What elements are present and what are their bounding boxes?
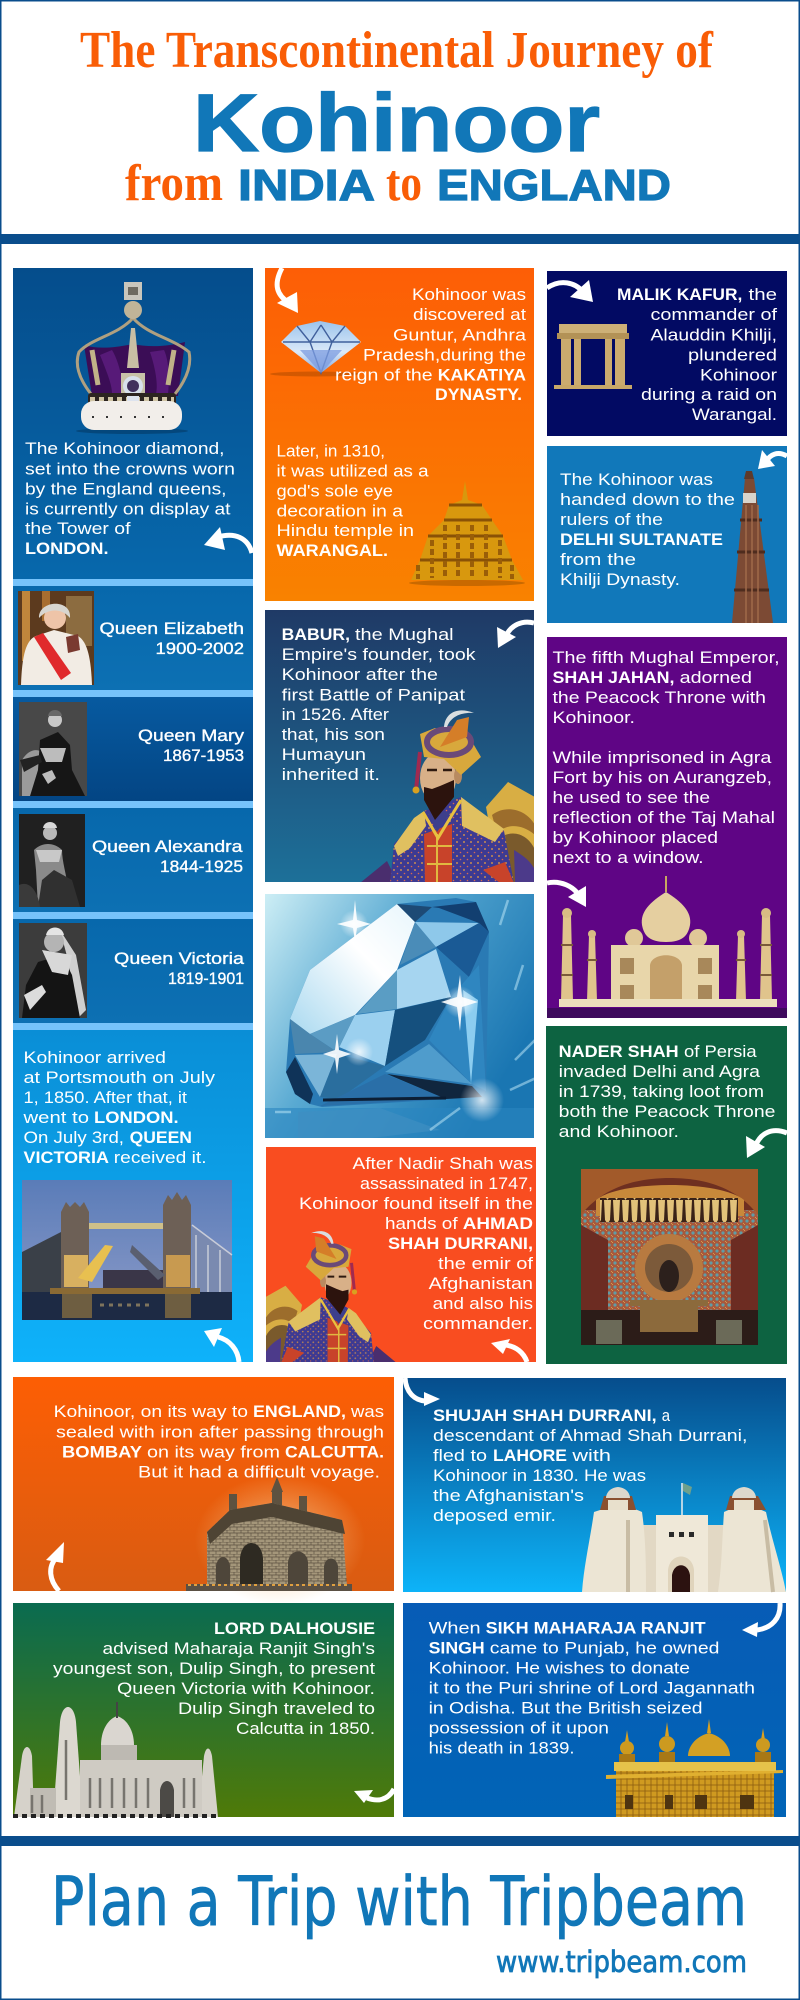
figure: Ahmad Shah Durrani <box>265 1231 396 1363</box>
website url: www.tripbeam.com <box>496 1945 747 1979</box>
panel: Sikh Maharaja Ranjit Singh <box>403 1603 786 1817</box>
photo: Tower Bridge <box>22 1180 232 1320</box>
text block: handed down to the <box>560 491 735 509</box>
arrow <box>547 882 586 907</box>
text block: the Tower of <box>25 520 131 538</box>
icon: diamond <box>270 321 361 376</box>
text block <box>22 1049 216 1167</box>
text block: AHMAD <box>463 1215 533 1233</box>
text block: DELHI SULTANATE <box>560 531 723 549</box>
text block: by Kohinoor placed <box>552 829 718 847</box>
text block: in 1526. After <box>282 706 390 724</box>
arrow <box>547 280 593 302</box>
text block: CALCUTTA. <box>285 1444 384 1462</box>
text block: is currently on display at <box>25 500 231 518</box>
text block: discovery: Pradesh,during the <box>363 346 526 364</box>
panel: discovery at Guntur and Warangal temple <box>265 268 534 601</box>
text block: youngest son, Dulip Singh, to present <box>53 1660 375 1678</box>
icon: large diamond <box>275 898 537 1138</box>
text block: was <box>350 1403 384 1421</box>
panel: Queen Alexandra <box>13 801 253 912</box>
text block: received it. <box>114 1149 207 1167</box>
text block: discovery: Kohinoor was <box>412 286 526 304</box>
text block: rulers of the <box>560 511 663 529</box>
text block: discovery: KAKATIYA <box>438 366 526 384</box>
text block: discovery <box>335 286 527 404</box>
label: Queen Alexandra: Queen Alexandra <box>92 837 243 856</box>
text block: Kohinoor <box>700 366 778 384</box>
panel: Delhi Sultanate <box>547 446 787 623</box>
arrow <box>277 268 298 313</box>
label: Queen Alexandra: 1844-1925 <box>160 857 243 876</box>
arrow <box>491 1339 527 1362</box>
title <box>80 22 714 212</box>
panel: Malik Kafur <box>547 271 787 436</box>
panel: Ahmad Shah Durrani <box>265 1147 536 1363</box>
text block: The fifth Mughal Emperor, <box>552 649 780 667</box>
text block: descendant of Ahmad Shah Durrani, <box>433 1427 747 1445</box>
text block: with <box>571 1447 611 1465</box>
text block: commander of <box>650 306 777 324</box>
title line 3: INDIA <box>238 161 375 210</box>
panel: Babur <box>265 610 535 883</box>
text block: came to Punjab, he owned <box>490 1640 719 1658</box>
text block: hands of <box>385 1215 458 1233</box>
icon: Lahore Fort <box>582 1483 786 1592</box>
text block: of Persia <box>684 1043 758 1061</box>
panel: Shujah Shah Durrani <box>403 1378 786 1592</box>
icon: Qutub Minar <box>732 471 773 623</box>
text block: possession of it upon <box>429 1720 609 1738</box>
text block: next to a window. <box>552 849 704 867</box>
text block: went to <box>22 1109 89 1127</box>
text block <box>560 471 735 589</box>
text block: QUEEN <box>130 1129 192 1147</box>
text block: discovery: Guntur, Andhra <box>393 326 527 344</box>
text block: discovery: reign of the <box>335 366 433 384</box>
portrait: Queen Elizabeth <box>18 591 94 685</box>
panel: crown and Kohinoor on display <box>13 268 253 579</box>
text block <box>282 626 476 784</box>
text block: Humayun <box>282 746 366 764</box>
text block: assassinated in 1747, <box>360 1175 533 1193</box>
text block: Warangal: Hindu temple in <box>276 522 414 540</box>
arrow <box>204 527 252 553</box>
label: Queen Mary: 1867-1953 <box>163 746 244 765</box>
icon: Taj Mahal <box>547 876 787 1018</box>
text block <box>53 1620 375 1738</box>
text block: in 1739, taking loot from <box>559 1083 764 1101</box>
text block: SHUJAH SHAH DURRANI, <box>433 1407 657 1425</box>
text block: the Mughal <box>355 626 454 644</box>
text block: that, his son <box>282 726 385 744</box>
text block <box>429 1620 755 1758</box>
title line 3 <box>125 155 671 212</box>
icon: temple <box>409 481 525 586</box>
text block <box>559 1043 776 1141</box>
label: Queen Victoria: 1819-1901 <box>168 969 244 988</box>
text block: the emir of <box>438 1255 534 1273</box>
text block: sealed with iron after passing through <box>56 1424 384 1442</box>
text block: he used to see the <box>552 789 710 807</box>
title line 3: ENGLAND <box>437 161 671 210</box>
text block: Warangal: decoration in a <box>276 502 404 520</box>
title line 3: from <box>125 155 223 212</box>
text block: BOMBAY <box>62 1444 142 1462</box>
text block: deposed emir. <box>433 1507 556 1525</box>
text block: the Peacock Throne with <box>552 689 766 707</box>
text block: After Nadir Shah was <box>352 1155 533 1173</box>
text block: the <box>748 286 777 304</box>
label: Queen Elizabeth: 1900-2002 <box>156 639 244 658</box>
label: Queen Victoria <box>114 949 245 988</box>
text block: Warangal: god's sole eye <box>276 482 393 500</box>
text block: LONDON. <box>25 540 108 558</box>
label: Queen Mary: Queen Mary <box>138 726 245 745</box>
arrow <box>497 622 534 648</box>
panel: Queen Elizabeth <box>13 579 253 690</box>
title line 1: The Transcontinental Journey of <box>80 22 714 79</box>
icon: Golden Temple <box>606 1719 783 1817</box>
text block <box>54 1403 384 1482</box>
header divider bar <box>0 234 800 244</box>
text block: NADER SHAH <box>559 1043 679 1061</box>
text block <box>25 440 235 558</box>
text block: it to the Puri shrine of Lord Jagannath <box>429 1680 755 1698</box>
text block: Kohinoor, on its way to <box>54 1403 248 1421</box>
text block: Kohinoor. He wishes to donate <box>429 1660 690 1678</box>
text block: Afghanistan <box>429 1275 533 1293</box>
panel: large diamond illustration <box>265 894 537 1138</box>
label: Queen Elizabeth: Queen Elizabeth <box>100 619 244 638</box>
text block: Kohinoor in 1830. He was <box>433 1467 646 1485</box>
label: Queen Elizabeth <box>100 619 244 658</box>
text block <box>433 1407 747 1525</box>
arrow <box>746 1131 787 1158</box>
arrow <box>354 1789 394 1803</box>
text block: LONDON. <box>94 1109 179 1127</box>
text block <box>617 286 778 424</box>
text block: Kohinoor found itself in the <box>299 1195 533 1213</box>
text block: by the England queens, <box>25 480 227 498</box>
text block <box>552 649 780 867</box>
icon: Warangal gate <box>554 324 632 389</box>
icon: Victoria Memorial <box>13 1702 219 1817</box>
text block: VICTORIA <box>24 1149 109 1167</box>
panel: Queen Victoria <box>13 912 253 1023</box>
text block: reflection of the Taj Mahal <box>552 809 775 827</box>
text block: Dulip Singh traveled to <box>178 1700 375 1718</box>
portrait: Queen Alexandra <box>19 814 85 907</box>
text block: While imprisoned in Agra <box>552 749 772 767</box>
text block: SIKH MAHARAJA RANJIT <box>486 1620 706 1638</box>
icon: Gateway of India <box>186 1475 365 1605</box>
text block: adorned <box>680 669 752 687</box>
text block: Kohinoor. <box>552 709 635 727</box>
panel: Nader Shah <box>546 1026 787 1364</box>
arrow <box>742 1603 780 1637</box>
text block: Fort by his on Aurangzeb, <box>552 769 772 787</box>
text block: first Battle of Panipat <box>282 686 465 704</box>
label: Queen Mary <box>138 726 245 765</box>
text block: a <box>662 1407 671 1425</box>
text block: Kohinoor after the <box>282 666 438 684</box>
panel: Queen Mary <box>13 690 253 801</box>
text block: the Afghanistan's <box>433 1487 584 1505</box>
title line 2: Kohinoor: Kohinoor <box>193 78 600 169</box>
text block: on its way from <box>147 1444 280 1462</box>
text block: discovery: discovered at <box>413 306 526 324</box>
text block: advised Maharaja Ranjit Singh's <box>102 1640 375 1658</box>
text block: and Kohinoor. <box>559 1123 679 1141</box>
text block: during a raid on <box>641 386 777 404</box>
text block: MALIK KAFUR, <box>617 286 742 304</box>
footer call to action <box>51 1863 747 1979</box>
text block: BABUR, <box>282 626 350 644</box>
text block: When <box>429 1620 481 1638</box>
text block: ENGLAND, <box>253 1403 346 1421</box>
text block: his death in 1839. <box>429 1740 574 1758</box>
text block: and also his <box>433 1295 533 1313</box>
photo: Peacock Throne <box>581 1169 758 1345</box>
text block <box>299 1155 534 1333</box>
text block: LORD DALHOUSIE <box>214 1620 375 1638</box>
text block: discovery: DYNASTY. <box>435 386 522 404</box>
footer divider bar <box>0 1836 800 1846</box>
text block: from the <box>560 551 636 569</box>
title line 3: to <box>386 155 422 212</box>
text block: But it had a difficult voyage. <box>138 1464 380 1482</box>
figure: Babur <box>360 710 535 883</box>
text block: Empire's founder, took <box>282 646 476 664</box>
arrow <box>46 1542 64 1591</box>
arrow <box>758 450 787 469</box>
text block: Kohinoor arrived <box>24 1049 166 1067</box>
text block: LAHORE <box>493 1447 567 1465</box>
text block: Alauddin Khilji, <box>650 326 777 344</box>
arrow <box>204 1328 239 1362</box>
text block: SHAH DURRANI, <box>388 1235 533 1253</box>
text block: in Odisha. But the British seized <box>429 1700 702 1718</box>
text block: Queen Victoria with Kohinoor. <box>117 1680 375 1698</box>
text block: Warangal: it was utilized as a <box>276 462 429 480</box>
text block: Khilji Dynasty. <box>560 571 680 589</box>
text block: The Kohinoor was <box>560 471 713 489</box>
panel: Kohinoor arrives in England <box>13 1023 253 1362</box>
text block: The Kohinoor diamond, <box>25 440 224 458</box>
text block: 1, 1850. After that, it <box>24 1089 187 1107</box>
text block: Warangal. <box>692 406 777 424</box>
portrait: Queen Victoria <box>19 923 87 1018</box>
text block: set into the crowns worn <box>25 460 235 478</box>
panel: Lord Dalhousie <box>13 1603 394 1817</box>
text block: Warangal <box>276 442 429 560</box>
text block: both the Peacock Throne <box>559 1103 776 1121</box>
text block: plundered <box>688 346 777 364</box>
text block: SINGH <box>429 1640 485 1658</box>
panel: Shah Jahan and Taj Mahal <box>547 637 787 1018</box>
icon: crown <box>76 282 190 434</box>
text block: Warangal: WARANGAL. <box>276 542 388 560</box>
text block: fled to <box>433 1447 487 1465</box>
text block: invaded Delhi and Agra <box>559 1063 761 1081</box>
text block: On July 3rd, <box>24 1129 124 1147</box>
arrow <box>405 1378 440 1406</box>
text block: inherited it. <box>282 766 380 784</box>
text block: commander. <box>423 1315 533 1333</box>
panel: Bombay voyage <box>13 1377 394 1605</box>
label: Queen Alexandra <box>92 837 243 876</box>
text block: Calcutta in 1850. <box>236 1720 375 1738</box>
portrait: Queen Mary <box>19 702 87 796</box>
text block: SHAH JAHAN, <box>552 669 674 687</box>
label: Queen Victoria: Queen Victoria <box>114 949 245 968</box>
text block: Warangal: Later, in 1310, <box>276 442 385 460</box>
text block: at Portsmouth on July <box>24 1069 216 1087</box>
